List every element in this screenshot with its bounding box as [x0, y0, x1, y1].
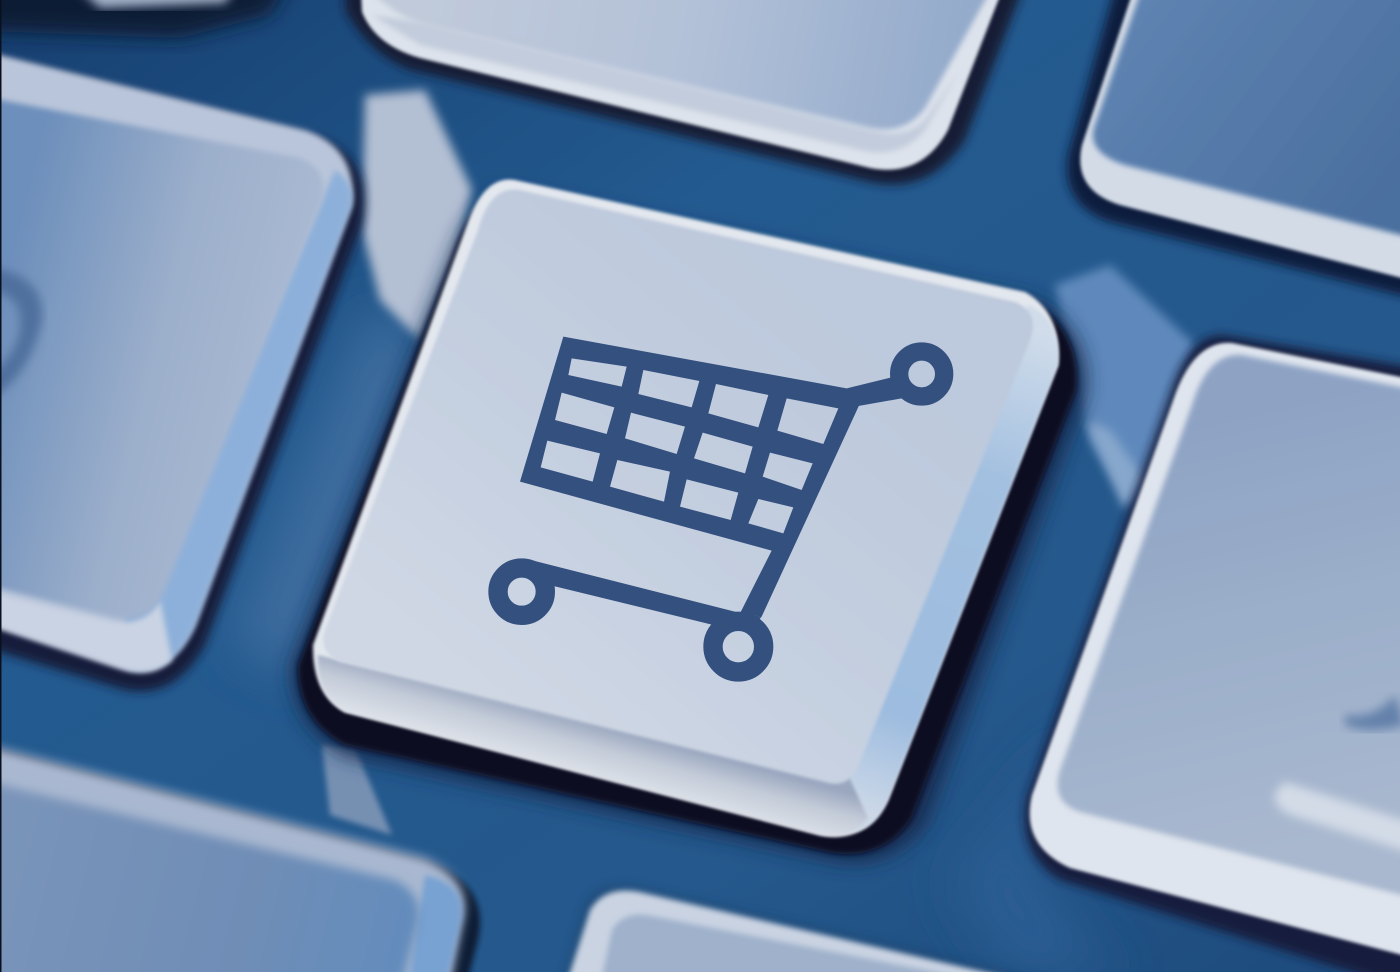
key: shopping cart — [292, 180, 1085, 862]
wall — [360, 0, 1010, 170]
cart lower frame — [533, 561, 762, 630]
left wheel — [498, 568, 545, 615]
key front wall — [318, 655, 868, 836]
key: left — [0, 45, 364, 692]
front wall — [0, 585, 172, 672]
key right band — [830, 305, 1058, 833]
right wheel — [713, 621, 764, 672]
key rim — [313, 180, 1058, 837]
wall — [0, 45, 353, 670]
surface — [1058, 355, 1400, 905]
surface — [0, 92, 324, 619]
lower wall shading — [372, 15, 960, 152]
partial key at top-left edge — [0, 0, 300, 38]
key hard shadow — [298, 194, 1077, 854]
light reflections on the base — [230, 90, 1195, 972]
surface — [0, 775, 419, 972]
key soft shadow — [292, 194, 1085, 862]
blurred key legend mark — [1345, 695, 1400, 730]
key: bottom center — [555, 886, 1130, 972]
icon: shopping cart — [498, 337, 944, 672]
wall — [0, 738, 465, 972]
cart handle — [847, 377, 902, 406]
key: top right — [1067, 0, 1400, 305]
blurred key legend bar — [1275, 782, 1400, 862]
key: bottom left — [0, 738, 480, 972]
left edge line — [0, 0, 2, 972]
cart handle ring — [899, 351, 944, 396]
blurred key legend — [0, 268, 42, 400]
key: top center — [345, 0, 1030, 184]
right blue band — [125, 170, 352, 669]
key: right — [1025, 335, 1400, 972]
key top surface — [323, 190, 1033, 784]
wall — [1030, 343, 1400, 965]
surface — [365, 0, 1002, 129]
right blue band — [405, 875, 462, 972]
cart basket — [520, 337, 860, 617]
